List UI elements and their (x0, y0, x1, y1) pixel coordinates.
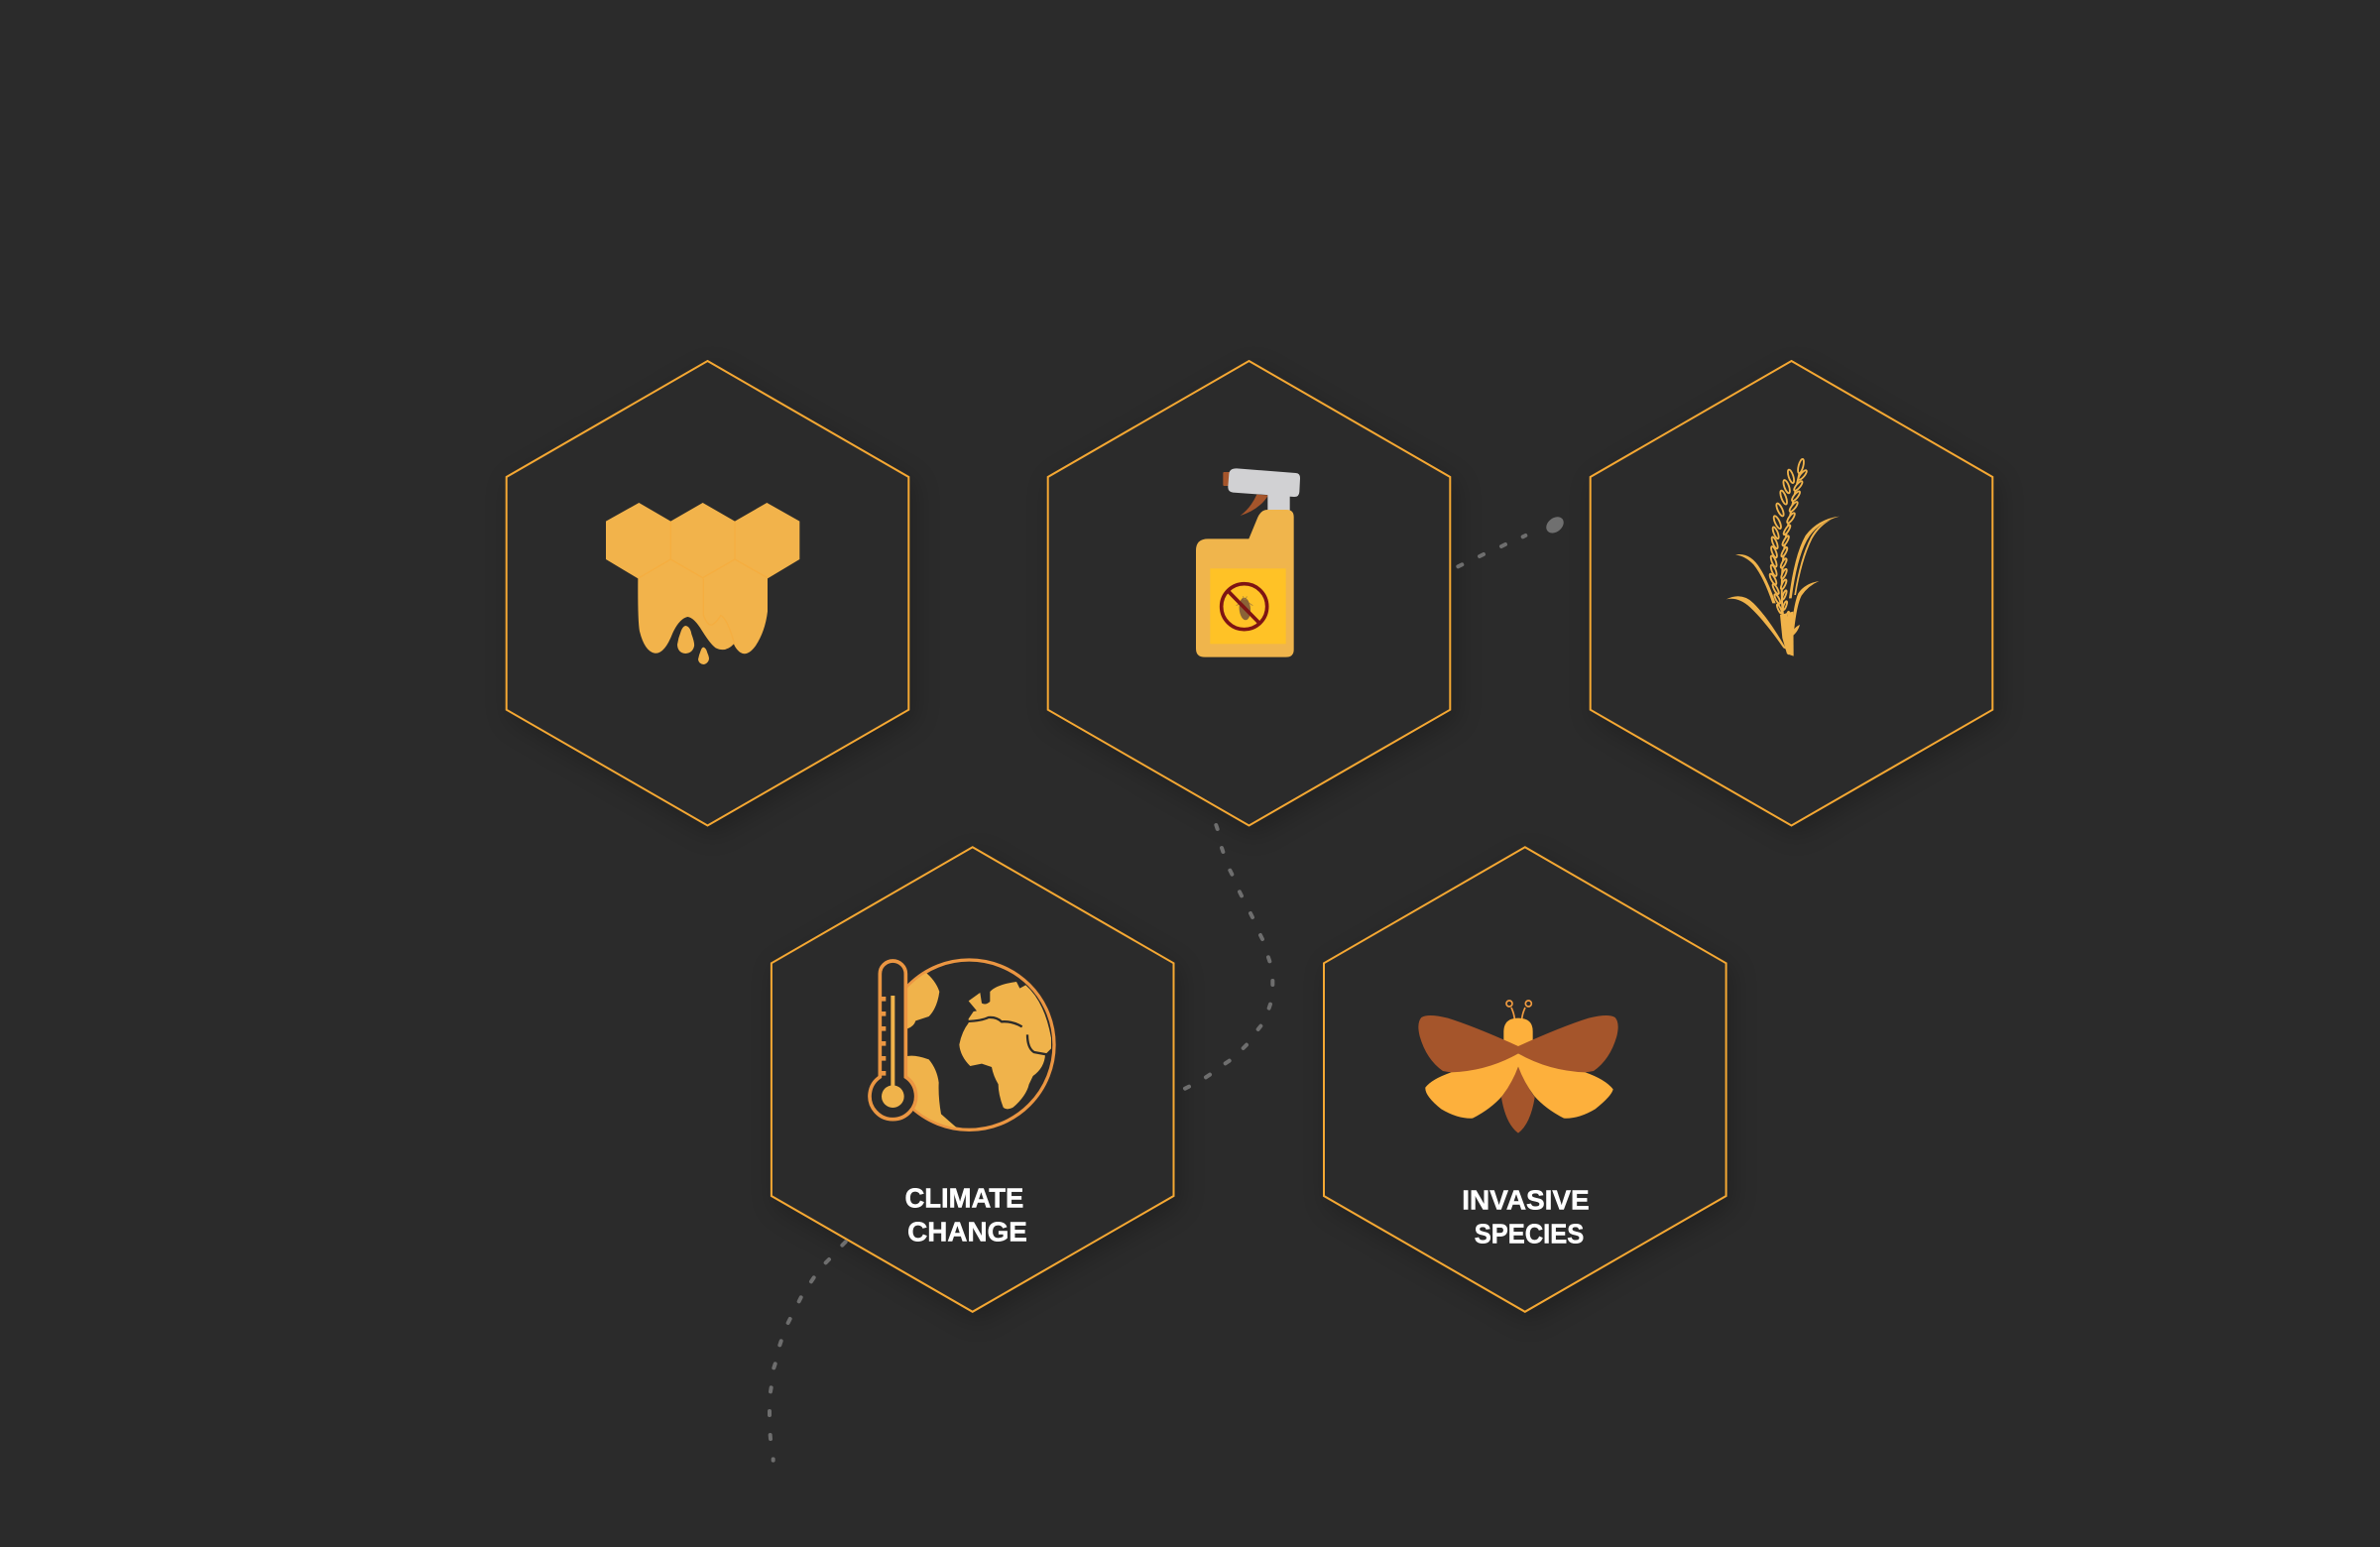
icon: globe and thermometer (870, 960, 1054, 1132)
panel: honey hexagon (507, 361, 908, 825)
icon: wheat stalk (1726, 458, 1840, 656)
text: invasive species: SPECIES (1475, 1218, 1584, 1249)
text: invasive species (1462, 1184, 1590, 1249)
text: climate change: CLIMATE (904, 1183, 1023, 1214)
icon: moth (1418, 1001, 1618, 1133)
icon: dripping honeycomb (606, 503, 799, 664)
arrow: dotted bee path between pesticide and wheat (1458, 514, 1567, 566)
arrow: dotted bee path leaving climate change (770, 1242, 846, 1461)
panel: climate change hexagon (772, 847, 1174, 1312)
icon: spray bottle (1196, 468, 1300, 657)
text: invasive species: INVASIVE (1462, 1184, 1590, 1215)
panel: invasive species hexagon (1324, 847, 1726, 1312)
arrow: dotted bee path between pesticide and climate change (1185, 825, 1272, 1089)
panel: pesticide hexagon (1048, 361, 1450, 825)
text: climate change (904, 1183, 1027, 1248)
text: climate change: CHANGE (907, 1217, 1027, 1248)
panel: wheat hexagon (1591, 361, 1992, 825)
